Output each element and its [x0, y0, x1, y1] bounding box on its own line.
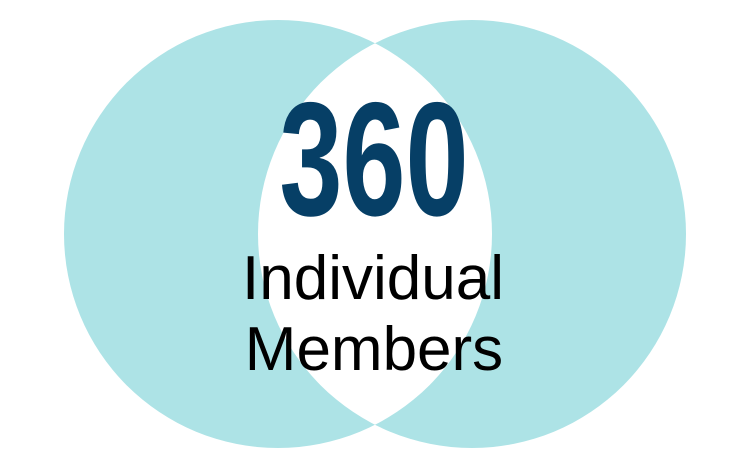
venn diagram: two overlapping circles [64, 20, 686, 448]
big number 360: 360 [279, 68, 469, 250]
left circle [64, 20, 492, 448]
overlap lens (white) [258, 44, 492, 425]
text: Members [245, 315, 503, 384]
label: Individual Members: Individual [242, 244, 504, 313]
right circle [258, 20, 686, 448]
